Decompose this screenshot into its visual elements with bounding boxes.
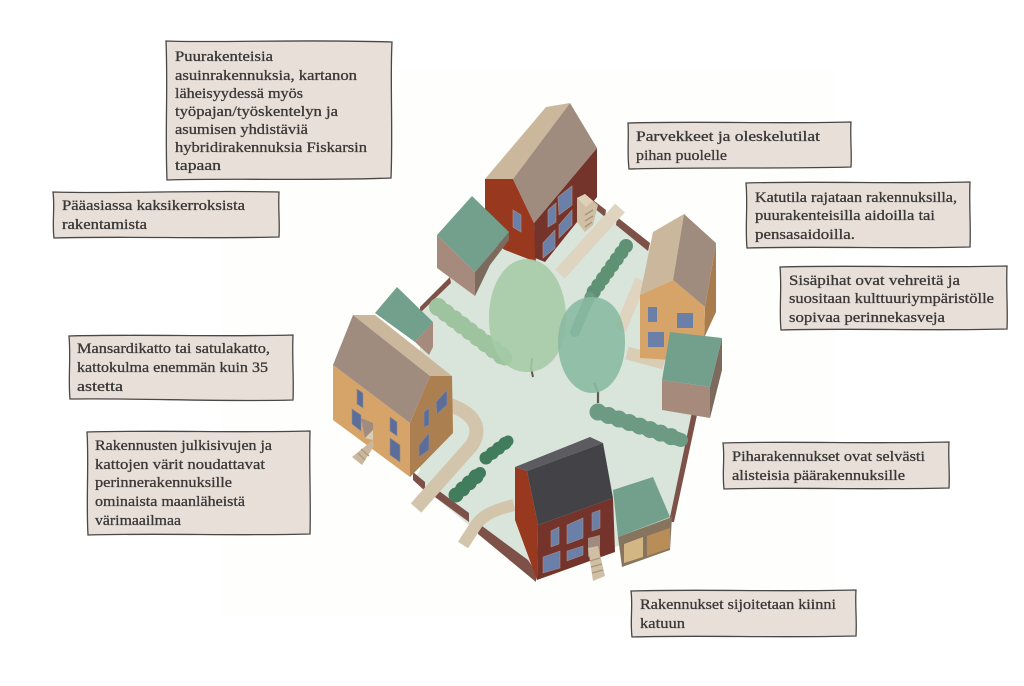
callout: street placement: Rakennukset sijoitetaan kiinni (640, 597, 836, 613)
callout: courtyards: Sisäpihat ovat vehreitä ja (789, 273, 961, 289)
callout: facade colours: ominaista maanläheistä (95, 494, 246, 510)
red house (485, 103, 597, 262)
green shed by red house (437, 196, 509, 296)
callout: wooden residential buildings: työpajan/työskentelyn ja (175, 104, 339, 120)
callout: street placement (631, 590, 856, 637)
callout: balconies: Parvekkeet ja oleskelutilat (636, 129, 820, 145)
callout: yard buildings: alisteisia päärakennuksille (732, 468, 905, 484)
red house stairs (577, 194, 598, 232)
brick house stairs (588, 546, 605, 581)
callout: street placement: katuun (640, 616, 686, 632)
callout: facade colours: perinnerakennuksille (95, 475, 232, 491)
callout: facade colours: värimaailmaa (95, 513, 182, 529)
callout: two-storey construction: Pääasiassa kaksikerroksista (62, 198, 246, 214)
callout: roof form: kattokulma enemmän kuin 35 (77, 360, 268, 376)
callout: wooden residential buildings: asumisen yhdistäviä (175, 122, 309, 138)
callout: balconies (628, 122, 851, 169)
callout: two-storey construction (53, 191, 279, 238)
tree: mid green (558, 297, 625, 403)
callout: facade colours (87, 431, 310, 535)
callout: facade colours: Rakennusten julkisivujen ja (95, 438, 273, 454)
callout: facade colours: kattojen värit noudattavat (95, 457, 265, 473)
callout: street space (746, 182, 970, 248)
callout: yard buildings: Piharakennukset ovat selvästi (732, 449, 925, 465)
courtyard ground (414, 208, 696, 580)
garden paths (416, 208, 664, 545)
callout: yard buildings (723, 442, 949, 489)
hedges (438, 246, 681, 495)
callout: courtyards (780, 266, 1007, 330)
callout: street space: puurakenteisilla aidoilla tai (755, 208, 935, 224)
green shed on the right (662, 332, 722, 418)
callout: street space: Katutila rajataan rakennuksilla, (755, 190, 957, 206)
dark-roofed brick house (515, 437, 615, 580)
callout: wooden residential buildings: Puurakenteisia (175, 49, 274, 65)
callout: roof form: astetta (77, 379, 124, 395)
callout: wooden residential buildings: asuinrakennuksia, kartanon (175, 68, 358, 84)
callout: courtyards: sopivaa perinnekasveja (789, 310, 946, 326)
left house (333, 315, 453, 477)
callout: wooden residential buildings (166, 41, 392, 180)
callout: two-storey construction: rakentamista (62, 217, 148, 233)
callout: roof form: Mansardikatto tai satulakatto, (77, 341, 270, 357)
callout: wooden residential buildings: tapaan (175, 158, 222, 174)
callout: wooden residential buildings: läheisyydessä myös (175, 86, 303, 102)
callout: street space: pensasaidoilla. (755, 227, 855, 243)
callout: wooden residential buildings: hybridirakennuksia Fiskarsin (175, 140, 368, 156)
callout: roof form (69, 335, 293, 401)
orange house on the right (640, 214, 716, 362)
garage (613, 477, 672, 567)
left house stairs (352, 440, 374, 465)
illustration: isometric courtyard block (333, 103, 722, 582)
callout: balconies: pihan puolelle (636, 148, 727, 164)
tree: light green (489, 259, 566, 377)
small shed behind left house (375, 287, 433, 355)
callout: courtyards: suositaan kulttuuriympäristölle (789, 291, 994, 307)
fences (413, 200, 697, 582)
